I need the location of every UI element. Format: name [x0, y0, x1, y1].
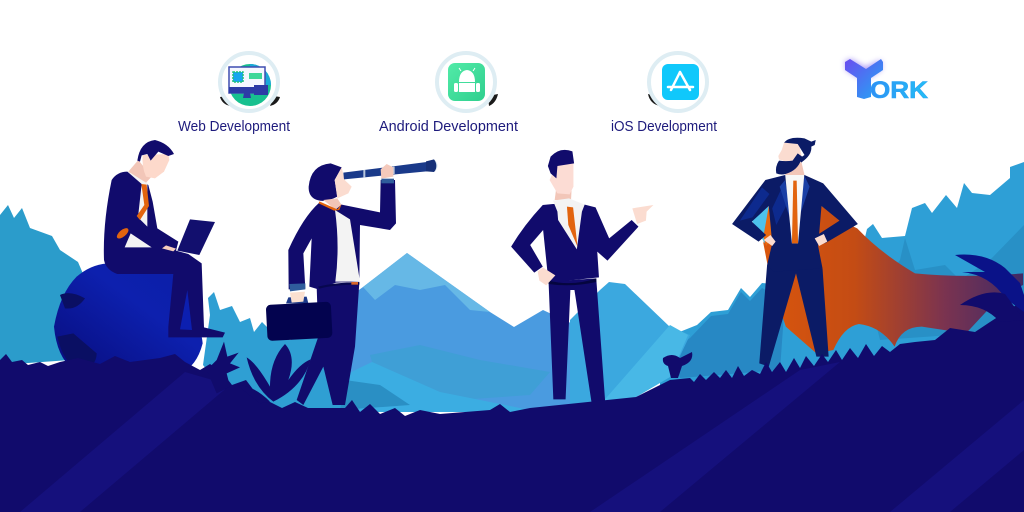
- face: [142, 154, 169, 178]
- label: iOS development: iOS Development: [611, 119, 717, 135]
- logo Y mark: [845, 59, 883, 99]
- hair: [137, 140, 174, 162]
- figure: man pointing: [511, 150, 653, 402]
- briefcase handle and hand: [286, 297, 308, 303]
- icon: web development: [220, 53, 280, 111]
- right foreground leaves: [955, 255, 1024, 322]
- hair: [309, 163, 342, 201]
- figure: woman with telescope: [266, 159, 438, 405]
- trousers: [549, 278, 605, 402]
- cuff: [289, 283, 305, 291]
- face: [550, 163, 573, 194]
- cape lining: [752, 206, 769, 243]
- logo: York: [845, 59, 929, 104]
- figure: superhero businessman with cape: [732, 138, 1023, 367]
- shirt: [785, 173, 804, 243]
- figure: man with laptop on rock: [54, 140, 225, 373]
- collar and shirt: [553, 198, 585, 249]
- pointing hand: [632, 205, 653, 224]
- left hand: [538, 267, 555, 285]
- shirt: [335, 210, 360, 282]
- elbow patch: [115, 226, 130, 240]
- trousers: [297, 283, 359, 405]
- face: [778, 143, 803, 165]
- telescope hand: [381, 164, 393, 179]
- jacket highlight: [740, 187, 789, 225]
- tie: [137, 184, 149, 220]
- scarf: [319, 201, 342, 211]
- briefcase: [266, 302, 333, 341]
- belt: [318, 282, 359, 289]
- background foliage left: [0, 205, 380, 412]
- face: [335, 167, 352, 198]
- ground light bands: [20, 362, 1024, 512]
- rock: [54, 263, 203, 373]
- lapel: [780, 176, 810, 227]
- label: android development: Android Development: [379, 119, 518, 135]
- telescope: [343, 162, 427, 179]
- jacket: [732, 175, 858, 272]
- mushroom: [663, 352, 692, 378]
- hand: [162, 245, 176, 251]
- icon: android development: [437, 53, 498, 111]
- foreground ground with grass: [0, 300, 1024, 512]
- tie: [792, 181, 798, 243]
- leg gap: [180, 290, 192, 330]
- shirt: [125, 172, 152, 247]
- hair: [548, 150, 574, 178]
- suit: [104, 172, 225, 337]
- beard: [776, 153, 802, 175]
- background foliage right: [660, 162, 1024, 385]
- logo glow: [845, 59, 882, 78]
- mountains: [340, 253, 690, 412]
- belt: [549, 278, 596, 285]
- hair and bun: [784, 138, 816, 163]
- laptop: [177, 219, 215, 255]
- neck: [323, 198, 342, 209]
- trousers: [759, 265, 829, 367]
- rock shadows: [57, 293, 97, 372]
- icon: iOS development: [648, 53, 707, 111]
- foreground plant: [207, 342, 311, 403]
- jacket: [288, 180, 396, 289]
- neck: [785, 161, 804, 175]
- neck: [555, 187, 572, 200]
- jacket: [511, 204, 638, 283]
- logo wordmark: ORK: [870, 77, 929, 104]
- cape: [763, 205, 1023, 353]
- hands: [764, 234, 827, 246]
- tie: [567, 207, 578, 247]
- neck: [128, 160, 152, 183]
- label: web development: Web Development: [178, 119, 290, 135]
